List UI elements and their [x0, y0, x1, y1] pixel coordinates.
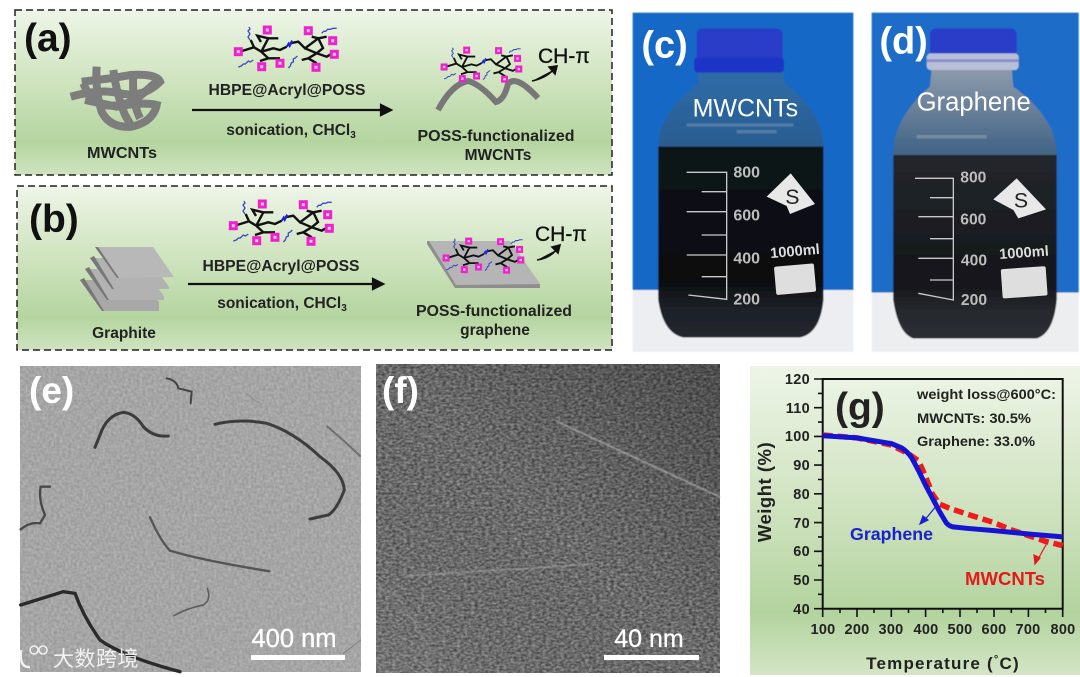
arrow: reaction [188, 279, 383, 289]
panel: (e) TEM image [20, 366, 361, 672]
label: CH-π: CH-π [538, 45, 590, 68]
curve: MWCNTs [823, 435, 1063, 546]
graduation marks [687, 172, 727, 299]
x axis labels: 400 [913, 622, 939, 638]
y axis labels: 60 [793, 544, 810, 560]
y axis labels: 80 [793, 487, 810, 503]
arrow: CH-π interaction [532, 66, 557, 81]
scale bar: 400 nm: 400 nm [251, 625, 337, 653]
y axis labels: 90 [793, 458, 810, 474]
label: sonication conditions: sonication, CHCl [226, 122, 350, 139]
panel: (b) graphene functionalization scheme [17, 186, 612, 350]
arrow: reaction [192, 105, 391, 115]
graphene edges [376, 421, 720, 672]
illumination shading [376, 364, 720, 673]
y axis labels [785, 372, 810, 618]
y axis labels: 70 [793, 516, 810, 532]
label patch [774, 263, 816, 295]
label: graduation numbers: 400 [961, 252, 987, 269]
y axis labels: 100 [785, 429, 810, 445]
annotation: weight loss values: MWCNTs: 30.5% [917, 411, 1031, 426]
x axis labels: 700 [1015, 622, 1041, 638]
label: 1000ml: 1000ml [770, 242, 820, 262]
icon: S logo: S [785, 185, 799, 209]
label: Graphene: Graphene [850, 524, 933, 544]
icon: S logo [993, 178, 1046, 218]
y axis labels: 110 [786, 401, 810, 417]
y axis labels: 50 [793, 573, 810, 589]
icon: adsorbed molecule [444, 239, 523, 272]
label: 1000ml: 1000ml [999, 244, 1049, 263]
curve: Graphene [823, 436, 1063, 537]
icon: CNT wave [438, 81, 538, 110]
x axis labels: 800 [1050, 622, 1076, 638]
plot frame and ticks [814, 379, 1063, 617]
icon: HBPE molecule [230, 201, 332, 244]
arrow: CH-π interaction [537, 245, 560, 260]
heading: (f): (f) [382, 370, 419, 411]
label: graduation numbers [960, 169, 987, 309]
y axis labels: 120 [785, 372, 810, 388]
label: MWCNTs: MWCNTs [87, 145, 157, 162]
label: MWCNTs: MWCNTs [693, 95, 798, 123]
label patch [1001, 266, 1048, 299]
y axis labels: 40 [793, 602, 810, 618]
x axis labels: 100 [810, 622, 836, 638]
heading: (d): (d) [879, 20, 928, 62]
panel: (f) HRTEM image [376, 364, 720, 673]
heading: (g): (g) [835, 386, 885, 429]
y axis title: Weight (%) [754, 442, 775, 542]
annotation: weight loss values: Graphene: 33.0% [917, 434, 1035, 449]
annotation: weight loss values: weight loss@600°C: [916, 387, 1056, 402]
label: sonication conditions: sonication, CHCl [217, 295, 341, 312]
label: sonication conditions: 3 [350, 130, 356, 141]
watermark: 大数跨境 [53, 648, 139, 671]
label: HBPE@Acryl@POSS: HBPE@Acryl@POSS [208, 82, 366, 99]
label: MWCNTs: MWCNTs [965, 569, 1045, 589]
x axis labels: 600 [981, 622, 1007, 638]
arrow: Graphene [920, 505, 937, 524]
heading: (b): (b) [29, 198, 79, 241]
x axis labels: 300 [878, 622, 904, 638]
icon: adsorbed molecule [442, 48, 521, 81]
icon: S logo [767, 173, 815, 214]
label: POSS-functionalized MWCNTs: MWCNTs [465, 147, 531, 164]
x axis labels: 500 [947, 622, 973, 638]
label: graduation numbers: 600 [960, 211, 987, 228]
label: graduation numbers: 800 [960, 169, 987, 186]
label: POSS-functionalized graphene: graphene [460, 322, 530, 339]
nanotubes [21, 378, 361, 672]
panel: (a) MWCNT functionalization scheme [15, 10, 612, 175]
x axis labels [810, 622, 1076, 638]
icon: graphite stack [80, 247, 174, 311]
label: Graphene: Graphene [917, 89, 1031, 117]
label: HBPE@Acryl@POSS: HBPE@Acryl@POSS [202, 258, 360, 275]
label: graduation numbers: 200 [733, 292, 760, 309]
x axis labels: 200 [844, 622, 870, 638]
icon: graphene sheet [427, 241, 540, 288]
x axis title: ° [994, 654, 999, 666]
icon: S logo: S [1014, 188, 1028, 212]
heading: (e): (e) [29, 370, 74, 411]
label: POSS-functionalized graphene: POSS-functionalized [416, 303, 572, 320]
x axis title: C) [999, 654, 1020, 673]
label: POSS-functionalized MWCNTs: POSS-functionalized [418, 128, 574, 145]
label: graduation numbers: 400 [733, 250, 760, 267]
label: graduation numbers [733, 164, 760, 309]
label: Graphite: Graphite [92, 325, 156, 342]
label: graduation numbers: 800 [733, 164, 760, 181]
annotation: weight loss values [916, 387, 1056, 449]
panel: (d) graphene dispersion photo [872, 13, 1079, 352]
panel: (g) TGA chart [750, 366, 1080, 675]
x axis title: Temperature ( [866, 654, 994, 673]
watermark [21, 646, 139, 671]
graduation marks [915, 178, 953, 300]
panel: (c) MWCNT dispersion photo [633, 13, 853, 352]
label: sonication conditions: 3 [341, 303, 347, 314]
scale bar: 40 nm: 40 nm [614, 625, 684, 653]
scale bar: 40 nm [604, 625, 699, 660]
icon: tangled MWCNTs [71, 67, 160, 128]
heading: (c): (c) [641, 25, 688, 67]
label: CH-π: CH-π [535, 223, 587, 246]
arrow: MWCNTs [1034, 543, 1047, 564]
label: graduation numbers: 200 [961, 292, 987, 309]
label: graduation numbers: 600 [733, 208, 760, 225]
heading: (a): (a) [24, 17, 72, 60]
icon: HBPE molecule [235, 27, 337, 70]
